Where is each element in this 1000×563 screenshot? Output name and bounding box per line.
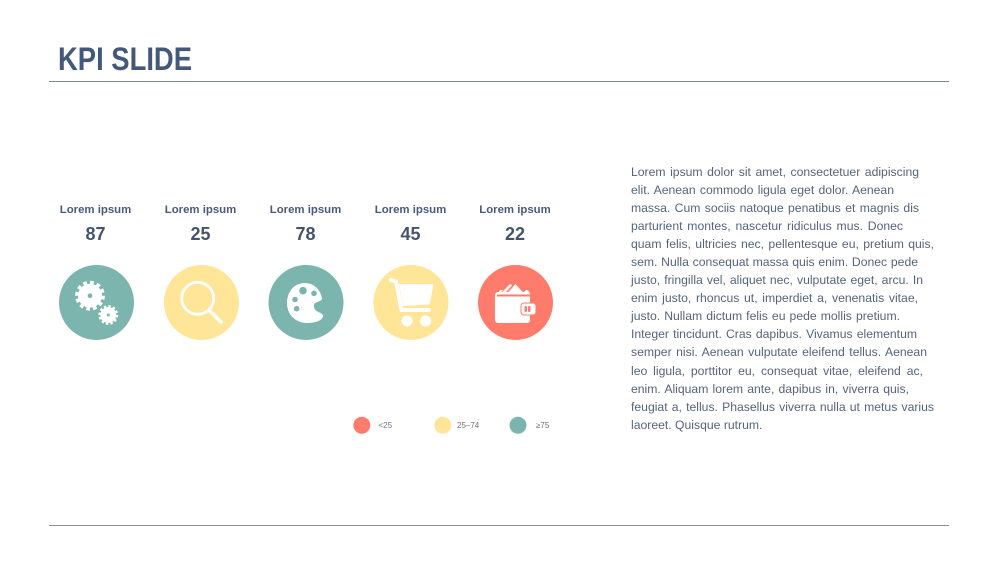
body text: massa. Cum sociis natoque penatibus et magnis dis <box>631 201 919 215</box>
KPI 2: magnifier: 25 <box>190 224 211 244</box>
KPI 3: palette: 78 <box>295 224 316 244</box>
body text: justo, fringilla vel, aliquet nec, vulputate eget, arcu. In <box>631 273 923 287</box>
body text: enim justo, rhoncus ut, imperdiet a, venenatis vitae, <box>631 291 918 305</box>
body text: feugiat a, tellus. Phasellus viverra nulla ut metus varius <box>631 400 934 414</box>
KPI 3: palette: Lorem ipsum <box>270 204 341 216</box>
KPI 2: magnifier: Lorem ipsum <box>165 204 236 216</box>
body text: parturient montes, nascetur ridiculus mus. Donec <box>631 219 903 233</box>
KPI 3: palette <box>268 204 344 340</box>
body text: Integer tincidunt. Cras dapibus. Vivamus elementum <box>631 327 917 341</box>
legend <box>353 417 550 434</box>
KPI 4: cart: 45 <box>400 224 421 244</box>
body text: justo. Nullam dictum felis eu pede mollis pretium. <box>631 309 900 323</box>
body text: leo ligula, porttitor eu, consequat vitae, eleifend ac, <box>631 364 923 378</box>
KPI 2: magnifier <box>164 204 239 340</box>
KPI 4: cart: Lorem ipsum <box>375 204 446 216</box>
body text: Lorem ipsum dolor sit amet, consectetuer adipiscing <box>631 165 919 179</box>
KPI 1: gears <box>59 204 134 340</box>
body text: laoreet. Quisque rutrum. <box>631 418 762 432</box>
legend: 25–74 <box>457 421 480 430</box>
legend: ≥75 <box>536 421 550 430</box>
icon: magnifier <box>182 282 221 322</box>
body text: quam felis, ultricies nec, pellentesque eu, pretium quis, <box>631 237 934 251</box>
legend: <25 <box>378 421 393 430</box>
KPI 5: wallet <box>478 204 553 340</box>
body text: enim. Aliquam lorem ante, dapibus in, viverra quis, <box>631 382 909 396</box>
icon: palette <box>287 283 323 323</box>
body text: elit. Aenean commodo ligula eget dolor. Aenean <box>631 183 894 197</box>
body text: semper nisi. Aenean vulputate eleifend tellus. Aenean <box>631 345 927 359</box>
icon: shopping cart <box>391 280 433 326</box>
KPI 4: cart <box>374 204 448 340</box>
KPI 1: gears: 87 <box>85 224 106 244</box>
icon: gears <box>77 282 117 324</box>
icon: wallet <box>495 284 536 323</box>
body text: sem. Nulla consequat massa quis enim. Donec pede <box>631 255 918 269</box>
KPI 1: gears: Lorem ipsum <box>60 204 131 216</box>
KPI 5: wallet: 22 <box>505 224 525 244</box>
title: KPI SLIDE <box>58 41 192 77</box>
body text <box>630 165 934 432</box>
KPI 5: wallet: Lorem ipsum <box>479 204 551 216</box>
